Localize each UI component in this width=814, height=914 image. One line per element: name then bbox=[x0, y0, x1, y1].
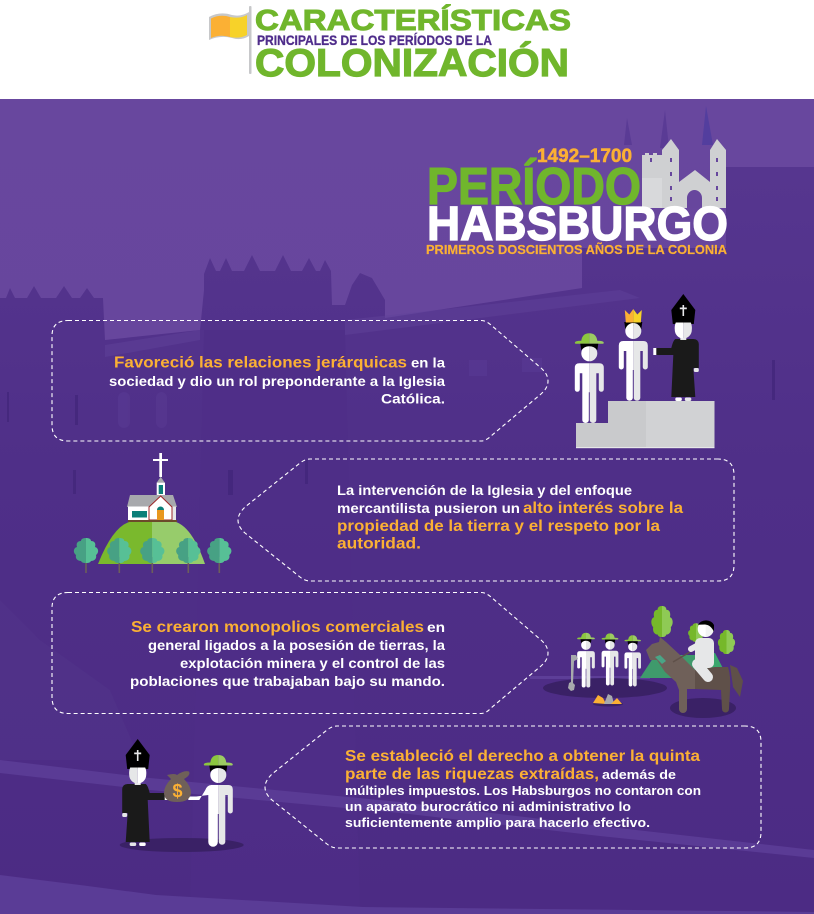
text block: múltiples impuestos. Los Habsburgos no contaron con bbox=[345, 783, 701, 798]
text block: además de bbox=[602, 767, 676, 782]
podium steps bbox=[576, 401, 714, 448]
hill bbox=[98, 521, 205, 564]
panel: relaciones jerárquicas bbox=[52, 320, 548, 441]
illustration: workers, gold and landowner on horse bbox=[530, 606, 743, 718]
ground band bbox=[530, 676, 650, 679]
figure: peasant with hat bbox=[575, 333, 604, 423]
shadow bbox=[120, 838, 244, 852]
text block: La intervención de la Iglesia y del enfoque bbox=[337, 482, 632, 498]
road band bbox=[0, 760, 814, 858]
church bbox=[127, 453, 177, 522]
text block: Se crearon monopolios comerciales bbox=[131, 619, 424, 636]
gold pile bbox=[593, 694, 623, 706]
text block: mercantilista pusieron un bbox=[337, 500, 520, 516]
shovel bbox=[568, 655, 578, 691]
illustration: social hierarchy on podium bbox=[575, 294, 714, 448]
dates: 1492–1700 bbox=[537, 146, 632, 167]
trees bbox=[74, 538, 231, 573]
text block bbox=[109, 354, 445, 406]
text block: en bbox=[427, 619, 445, 635]
text block: en la bbox=[411, 354, 445, 370]
text block: sociedad y dio un rol preponderante a la Iglesia bbox=[109, 373, 445, 389]
text block: Se estableció el derecho a obtener la quinta bbox=[345, 748, 700, 765]
text block: poblaciones que trabajaban bajo su mando. bbox=[130, 673, 445, 689]
figure: bishop bbox=[653, 294, 699, 401]
icon: castle bbox=[642, 139, 726, 208]
figure: peasant offering bag bbox=[188, 755, 233, 847]
text block: Católica. bbox=[381, 390, 445, 406]
panel: propiedad de la tierra bbox=[238, 459, 734, 581]
figure: king with crown bbox=[619, 309, 648, 401]
callout outline bbox=[265, 726, 761, 848]
callout outline bbox=[52, 320, 548, 441]
heading line 3: COLONIZACIÓN bbox=[255, 41, 569, 85]
text block: alto interés sobre la bbox=[523, 500, 683, 517]
callout outline bbox=[52, 592, 548, 714]
header background bbox=[0, 0, 814, 99]
text block: Favoreció las relaciones jerárquicas bbox=[114, 354, 407, 372]
text block: explotación minera y el control de las bbox=[180, 655, 445, 671]
rider bbox=[673, 620, 714, 677]
heading line 2: PRINCIPALES DE LOS PERÍODOS DE LA bbox=[257, 33, 492, 48]
text block bbox=[337, 482, 683, 552]
text block: un aparato burocrático ni administrativo lo bbox=[345, 799, 631, 814]
figure: bishop bbox=[122, 739, 168, 846]
icon: money bag: $ bbox=[172, 781, 183, 801]
subtitle: PRIMEROS DOSCIENTOS AÑOS DE LA COLONIA bbox=[426, 242, 728, 257]
callout outline bbox=[238, 459, 734, 581]
icon: flag bbox=[209, 6, 252, 74]
text block bbox=[345, 748, 701, 830]
text block bbox=[130, 619, 445, 689]
pavement bbox=[0, 875, 814, 914]
text block: autoridad. bbox=[337, 536, 421, 552]
shadows bbox=[543, 678, 667, 698]
horse bbox=[646, 637, 743, 713]
text block: propiedad de la tierra y el respeto por la bbox=[337, 518, 660, 535]
text block: general ligados a la posesión de tierras, la bbox=[148, 637, 445, 653]
illustration: bishop receiving money bag bbox=[120, 739, 244, 852]
panel: monopolios comerciales bbox=[52, 592, 548, 714]
period heading: Período Habsburgo bbox=[426, 139, 728, 257]
workers bbox=[577, 633, 641, 688]
heading: período: PERÍODO bbox=[427, 158, 641, 216]
heading line 1: CARACTERÍSTICAS bbox=[255, 3, 571, 37]
illustration: church on hill bbox=[74, 453, 231, 573]
flags bbox=[624, 106, 713, 148]
text block: parte de las riquezas extraídas, bbox=[345, 766, 599, 783]
heading: Habsburgo: HABSBURGO bbox=[427, 198, 728, 251]
text block: suficientemente amplio para hacerlo efectivo. bbox=[345, 815, 650, 830]
panel: derecho a la quinta parte bbox=[265, 726, 761, 848]
green hill and trees bbox=[640, 606, 735, 678]
title: características principales bbox=[209, 3, 571, 85]
